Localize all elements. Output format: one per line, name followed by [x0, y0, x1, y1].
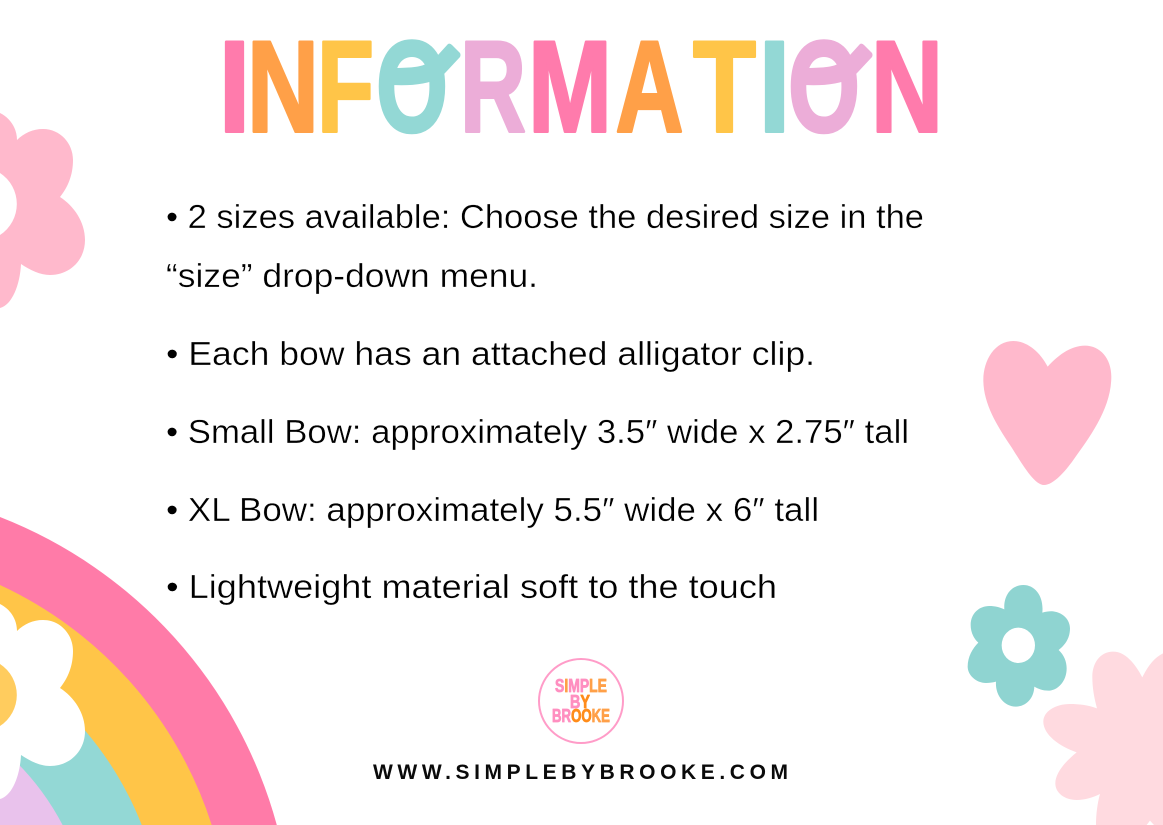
title: F [317, 14, 374, 160]
title: N [871, 14, 943, 160]
information list: • Each bow has an attached alligator clip. [166, 335, 815, 372]
title: O [376, 14, 448, 160]
logo badge: BROOKE [552, 706, 610, 726]
icon: white flower on rainbow [0, 604, 85, 799]
icon: pink flower top left [0, 113, 85, 308]
information list: • Lightweight material soft to the touch [166, 568, 777, 605]
information list: • XL Bow: approximately 5.5″ wide x 6″ tall [166, 491, 819, 528]
icon: light pink flower [1043, 652, 1163, 825]
information list: • 2 sizes available: Choose the desired size in the [166, 198, 924, 235]
logo badge [539, 659, 623, 743]
icon: rainbow [0, 517, 277, 825]
title: O [788, 14, 860, 160]
title: T [693, 14, 756, 160]
icon: teal flower [968, 585, 1070, 707]
title: R [460, 14, 526, 160]
title: N [247, 14, 319, 160]
title: I [758, 14, 790, 160]
title: I [218, 14, 250, 160]
logo badge: SIMPLE [555, 676, 607, 696]
icon: pink heart [983, 341, 1111, 485]
title [218, 14, 943, 160]
website url: WWW.SIMPLEBYBROOKE.COM [373, 761, 788, 784]
information list [166, 198, 924, 605]
logo badge: BY [570, 692, 590, 712]
title: M [528, 14, 612, 160]
information list: “size” drop-down menu. [166, 257, 538, 294]
information list: • Small Bow: approximately 3.5″ wide x 2.75″ tall [166, 413, 909, 450]
title: A [616, 14, 684, 160]
